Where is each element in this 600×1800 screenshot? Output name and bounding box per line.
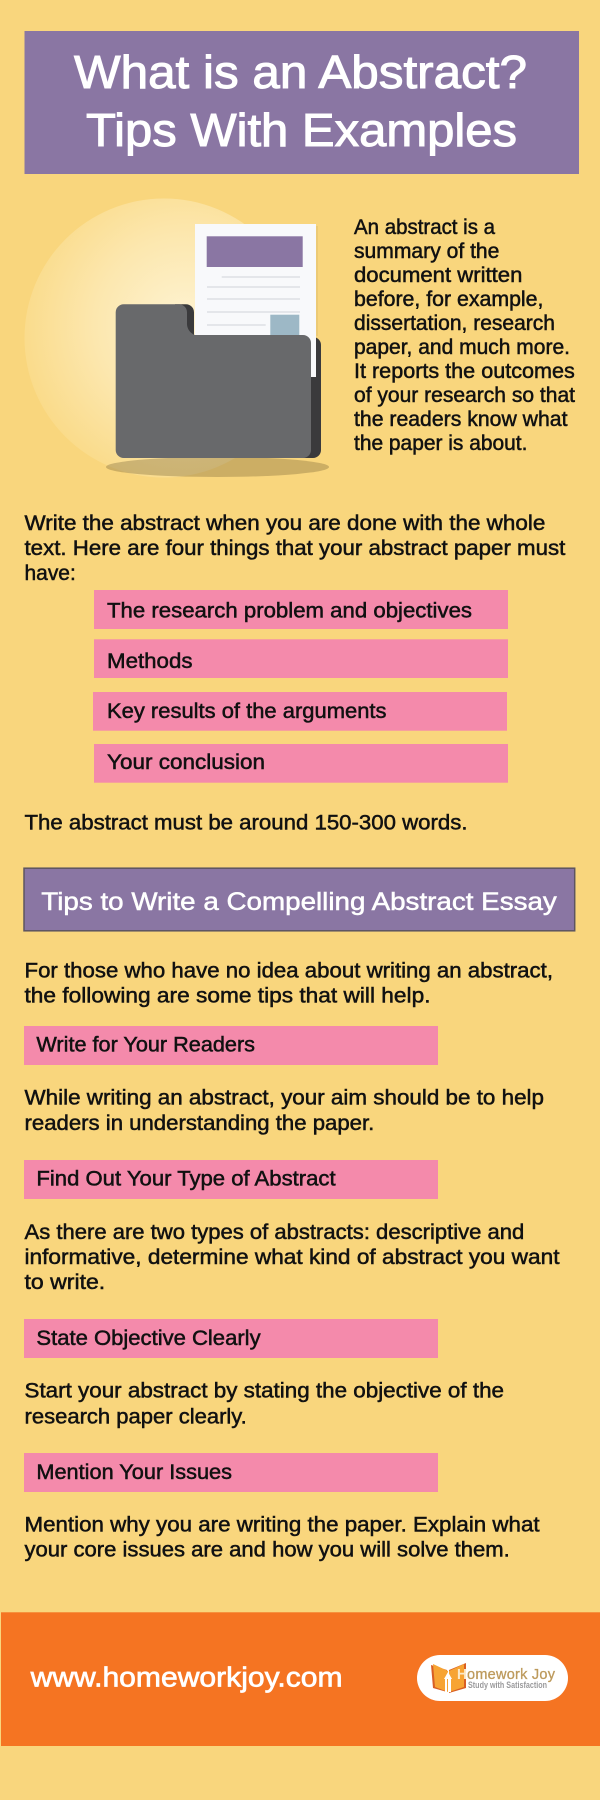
list item: research problem: The research problem and objectives (107, 600, 472, 623)
intro paragraph: paper, and much more. (354, 336, 570, 359)
tips intro paragraph: For those who have no idea about writing an abstract, (24, 959, 553, 982)
intro paragraph: document written (354, 264, 522, 287)
intro paragraph (354, 216, 575, 455)
logo: Homework Joy (417, 1655, 568, 1701)
intro paragraph: An abstract is a (354, 216, 495, 239)
tip heading: write for your readers (24, 1026, 438, 1065)
list item: research problem (94, 590, 508, 629)
list of four things (93, 590, 508, 783)
tips intro paragraph: the following are some tips that will help. (24, 985, 430, 1008)
word count note: The abstract must be around 150-300 words. (24, 811, 468, 834)
tips intro paragraph (24, 959, 553, 1008)
intro paragraph: It reports the outcomes (354, 360, 575, 383)
tip text: readers: While writing an abstract, your aim should be to help (24, 1086, 544, 1109)
tip text: issues: Mention why you are writing the paper. Explain what (24, 1514, 540, 1537)
illustration: folder with document (24, 198, 329, 478)
paragraph: when to write: Write the abstract when you are done with the whole (24, 512, 545, 535)
tip text: objective: research paper clearly. (24, 1405, 247, 1428)
tip text: issues: your core issues are and how you will solve them. (24, 1539, 510, 1562)
paragraph: when to write: have: (24, 562, 76, 585)
title banner (24, 31, 579, 174)
list item: key results (93, 692, 507, 731)
intro paragraph: summary of the (354, 240, 499, 263)
list item: conclusion: Your conclusion (107, 751, 265, 774)
intro paragraph: the paper is about. (354, 432, 527, 455)
section heading: tips: Tips to Write a Compelling Abstract Essay (41, 888, 557, 916)
tip heading: state objective (24, 1319, 438, 1358)
list item: key results: Key results of the arguments (107, 700, 386, 723)
tip heading: write for your readers: Write for Your Readers (36, 1034, 255, 1057)
footer band (1, 1612, 600, 1746)
tip text: type: As there are two types of abstracts: descriptive and (24, 1221, 524, 1244)
logo: Homework Joy: H (457, 1667, 467, 1683)
tip heading: find out your type (24, 1160, 438, 1199)
intro paragraph: before, for example, (354, 288, 543, 311)
tip text: objective: Start your abstract by stating the objective of the (24, 1380, 504, 1403)
logo: Homework Joy: Study with Satisfaction (468, 1680, 547, 1690)
intro paragraph: the readers know what (354, 408, 568, 431)
tip text: readers (24, 1086, 544, 1135)
section heading: tips (24, 868, 575, 931)
tip text: type: to write. (24, 1271, 105, 1294)
tip text: objective (24, 1380, 504, 1428)
tip heading: state objective: State Objective Clearly (36, 1327, 261, 1350)
tip text: issues (24, 1514, 540, 1562)
tip text: type: informative, determine what kind of abstract you want (24, 1246, 560, 1269)
icon: open book (431, 1663, 466, 1693)
tip text: type (24, 1221, 560, 1294)
tip text: readers: readers in understanding the paper. (24, 1112, 374, 1135)
paragraph: when to write (24, 512, 565, 585)
tip heading: find out your type: Find Out Your Type of Abstract (36, 1168, 336, 1191)
tip heading: mention your issues (24, 1453, 438, 1492)
paragraph: when to write: text. Here are four things that your abstract paper must (24, 537, 565, 560)
title banner: Tips With Examples (86, 104, 517, 156)
intro paragraph: of your research so that (354, 384, 575, 407)
list item: methods: Methods (107, 650, 192, 673)
intro paragraph: dissertation, research (354, 312, 555, 335)
website url: www.homeworkjoy.com (30, 1662, 343, 1693)
title banner: What is an Abstract? (74, 46, 527, 98)
logo: Homework Joy: omework Joy (467, 1667, 556, 1683)
tip heading: mention your issues: Mention Your Issues (36, 1461, 232, 1484)
list item: methods (94, 639, 508, 678)
list item: conclusion (94, 744, 508, 783)
